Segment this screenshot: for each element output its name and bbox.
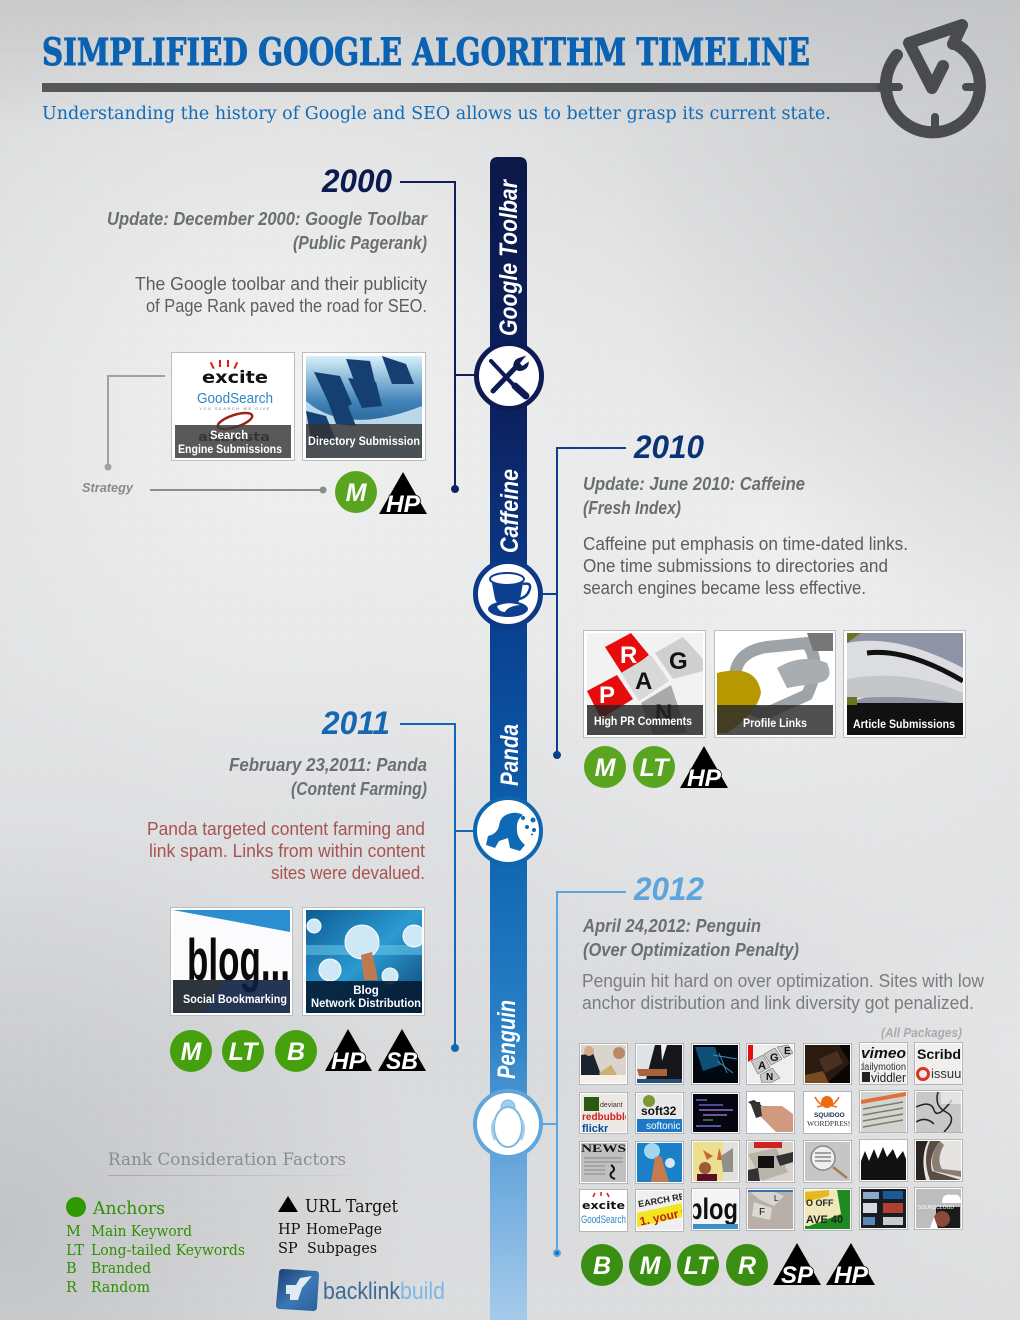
- text: 2011 description: [147, 819, 425, 883]
- thumbnail: profile links: [714, 630, 836, 738]
- thumbnail grid: all packages: issuu: [931, 1066, 961, 1081]
- thumbnail grid: all packages: WORDPRESS: [807, 1119, 852, 1128]
- heading: 2011 update: February 23,2011: Panda: [229, 755, 427, 775]
- thumbnail: blog network distribution: Blog: [353, 985, 379, 997]
- icon: coffee cup: [476, 562, 540, 626]
- strategy label: Strategy: [82, 480, 134, 495]
- badges: 2010: LT: [640, 754, 671, 782]
- logo: backlinkbuild: [276, 1269, 445, 1311]
- legend: url target: URL Target: [305, 1196, 399, 1217]
- heading: 2011 update: (Content Farming): [291, 779, 427, 799]
- connector: 2011: [400, 724, 476, 1051]
- thumbnail grid: all packages: SQUIDOO: [814, 1112, 845, 1119]
- thumbnail grid: all packages: E: [784, 1046, 791, 1057]
- thumbnail: blog network distribution: Network Distribution: [311, 998, 421, 1010]
- title rule: [42, 83, 892, 92]
- badges: 2010: M: [595, 754, 617, 782]
- thumbnail: social bookmarking: [170, 908, 292, 1016]
- text: 2012 description: anchor distribution and link diversity got penalized.: [582, 993, 974, 1013]
- thumbnail: high pr comments: [584, 630, 706, 738]
- heading: 2012 update: (Over Optimization Penalty): [583, 940, 799, 960]
- thumbnail: article submissions: Article Submissions: [853, 719, 955, 731]
- badges: 2012: [581, 1243, 875, 1289]
- badges: 2011: LT: [229, 1038, 260, 1066]
- thumbnail: directory submission: [302, 352, 426, 460]
- legend: anchors: M: [66, 1224, 81, 1240]
- thumbnail: engine submissions: [172, 352, 294, 460]
- badges: 2012: R: [738, 1252, 756, 1280]
- spine label: Caffeine: Caffeine: [496, 469, 524, 553]
- thumbnail: high pr comments: A: [635, 668, 652, 695]
- thumbnail: high pr comments: R: [620, 642, 637, 669]
- legend: anchors: Anchors: [92, 1198, 165, 1219]
- thumbnail grid: all packages: L: [774, 1194, 779, 1203]
- thumbnail: profile links: Profile Links: [743, 718, 807, 730]
- thumbnail: engine submissions: excite: [202, 368, 268, 388]
- strategy line: [150, 488, 326, 492]
- thumbnail: blog network distribution: [302, 908, 425, 1016]
- thumbnail grid: all packages: N: [766, 1072, 773, 1083]
- row 4: [581, 1192, 626, 1226]
- badges: 2011: HP: [331, 1048, 366, 1075]
- legend: url target: [278, 1196, 399, 1257]
- text: 2010 description: [583, 534, 908, 598]
- year: 2011: 2011: [321, 705, 390, 741]
- legend: anchors: Main Keyword: [91, 1224, 192, 1240]
- thumbnail grid: all packages: SOUNDCLOUD: [918, 1205, 954, 1211]
- thumbnail grid: all packages: [580, 1042, 962, 1232]
- legend: anchors: LT: [66, 1243, 84, 1259]
- text: 2011 description: Panda targeted content farming and: [147, 819, 425, 839]
- heading: 2010 update: Update: June 2010: Caffeine: [583, 474, 805, 494]
- badges: 2012: LT: [684, 1252, 715, 1280]
- legend: url target: Subpages: [307, 1241, 377, 1257]
- badges: 2012: M: [640, 1252, 662, 1280]
- heading: 2012 update: [582, 916, 799, 960]
- badges: 2011: SB: [386, 1048, 418, 1075]
- badges: 2010: HP: [687, 765, 722, 792]
- timeline spine: [490, 157, 527, 1320]
- subtitle: Understanding the history of Google and SEO allows us to better grasp its current state.: [42, 104, 831, 124]
- thumbnail: engine submissions: Search: [210, 430, 248, 442]
- row 2: deviant: [600, 1102, 623, 1109]
- thumbnail: engine submissions: GoodSearch: [197, 390, 273, 407]
- thumbnail: engine submissions: altavista: [198, 430, 270, 444]
- thumbnail: high pr comments: N: [655, 700, 672, 727]
- legend: anchors: [66, 1197, 245, 1296]
- legend: url target: SP: [278, 1241, 298, 1257]
- text: 2000 description: of Page Rank paved the road for SEO.: [146, 296, 427, 316]
- row 1: [581, 1045, 626, 1083]
- all packages label: (All Packages): [881, 1025, 962, 1040]
- text: 2000 description: [135, 274, 427, 316]
- thumbnail: high pr comments: High PR Comments: [594, 716, 692, 728]
- row 2: [581, 1094, 631, 1135]
- thumbnail: engine submissions: Engine Submissions: [178, 444, 282, 456]
- strategy bracket: [106, 376, 165, 470]
- heading: 2012 update: April 24,2012: Penguin: [582, 916, 761, 936]
- connector: 2012: [540, 892, 626, 1256]
- heading: 2010 update: (Fresh Index): [583, 498, 681, 518]
- connector: 2000: [400, 182, 478, 492]
- thumbnail: engine submissions: YOU SEARCH WE GIVE: [199, 406, 271, 411]
- text: 2010 description: search engines became less effective.: [583, 578, 866, 598]
- thumbnail grid: all packages: O OFF: [806, 1198, 834, 1208]
- thumbnail: high pr comments: G: [669, 648, 688, 675]
- legend: anchors: Random: [91, 1280, 150, 1296]
- row 3: NEWS: [581, 1141, 626, 1155]
- thumbnail grid: all packages: F: [759, 1207, 765, 1218]
- badges: 2011: M: [181, 1038, 203, 1066]
- badges: 2012: B: [593, 1252, 611, 1280]
- badges: 2011: B: [287, 1038, 305, 1066]
- icon: clock: [880, 25, 982, 132]
- row 3: [581, 1141, 626, 1182]
- icon: penguin: [475, 1091, 541, 1157]
- spine label: Penguin: Penguin: [493, 1000, 521, 1079]
- text: 2000 description: The Google toolbar and their publicity: [135, 274, 427, 294]
- badges: 2012: SP: [781, 1262, 814, 1289]
- badges: 2000: [335, 471, 427, 518]
- icon: tools: [476, 344, 542, 408]
- thumbnail grid: all packages: vimeo: [861, 1045, 906, 1062]
- badges: 2000: HP: [386, 491, 421, 518]
- thumbnail: high pr comments: P: [599, 682, 615, 709]
- row 2: flickr: [582, 1123, 609, 1135]
- text: 2010 description: Caffeine put emphasis on time-dated links.: [583, 534, 908, 554]
- text: 2012 description: Penguin hit hard on over optimization. Sites with low: [582, 971, 985, 991]
- thumbnail grid: all packages: softonic: [646, 1121, 680, 1132]
- badges: 2010: [584, 746, 728, 792]
- text: 2011 description: sites were devalued.: [271, 863, 425, 883]
- spine label: Google Toolbar: Google Toolbar: [495, 179, 523, 336]
- badges: 2000: M: [346, 479, 368, 507]
- year: 2012: 2012: [633, 871, 704, 907]
- legend heading: Rank Consideration Factors: [108, 1150, 346, 1170]
- thumbnail grid: all packages: AVE 40: [806, 1214, 843, 1226]
- thumbnail grid: all packages: soft32: [641, 1104, 677, 1118]
- heading: 2000 update: Update: December 2000: Google Toolbar: [107, 209, 428, 229]
- text: 2012 description: [582, 971, 985, 1013]
- row 4: excite: [582, 1199, 625, 1212]
- title: SIMPLIFIED GOOGLE ALGORITHM TIMELINE: [42, 30, 810, 74]
- thumbnail: article submissions: [844, 630, 966, 738]
- year: 2010: 2010: [633, 429, 704, 465]
- connector: 2010: [540, 448, 626, 758]
- heading: 2000 update: (Public Pagerank): [293, 233, 427, 253]
- thumbnail grid: all packages: Scribd: [917, 1046, 961, 1062]
- legend: anchors: Branded: [91, 1261, 151, 1277]
- badges: 2012: HP: [834, 1262, 869, 1289]
- thumbnail grid: all packages: EARCH RESU: [637, 1189, 698, 1209]
- badges: 2011: [170, 1029, 426, 1075]
- legend: url target: HomePage: [306, 1222, 382, 1238]
- text: 2010 description: One time submissions to directories and: [583, 556, 888, 576]
- heading: 2010 update: [583, 474, 805, 518]
- year: 2000: 2000: [321, 163, 392, 199]
- heading: 2011 update: [229, 755, 427, 799]
- text: 2011 description: link spam. Links from within content: [149, 841, 425, 861]
- heading: 2000 update: [107, 209, 428, 253]
- thumbnail grid: all packages: A: [758, 1060, 766, 1072]
- legend: anchors: R: [66, 1280, 78, 1296]
- legend: url target: HP: [278, 1222, 301, 1238]
- legend: anchors: Long-tailed Keywords: [91, 1243, 245, 1259]
- logo: backlinkbuild: backlinkbuild: [323, 1278, 445, 1305]
- icon: panda: [475, 798, 541, 864]
- thumbnail grid: all packages: G: [770, 1052, 779, 1064]
- thumbnail grid: all packages: 1. your w: [638, 1204, 693, 1229]
- legend: anchors: B: [66, 1261, 77, 1277]
- spine label: Panda: Panda: [496, 724, 524, 786]
- row 2: redbubble: [582, 1112, 631, 1123]
